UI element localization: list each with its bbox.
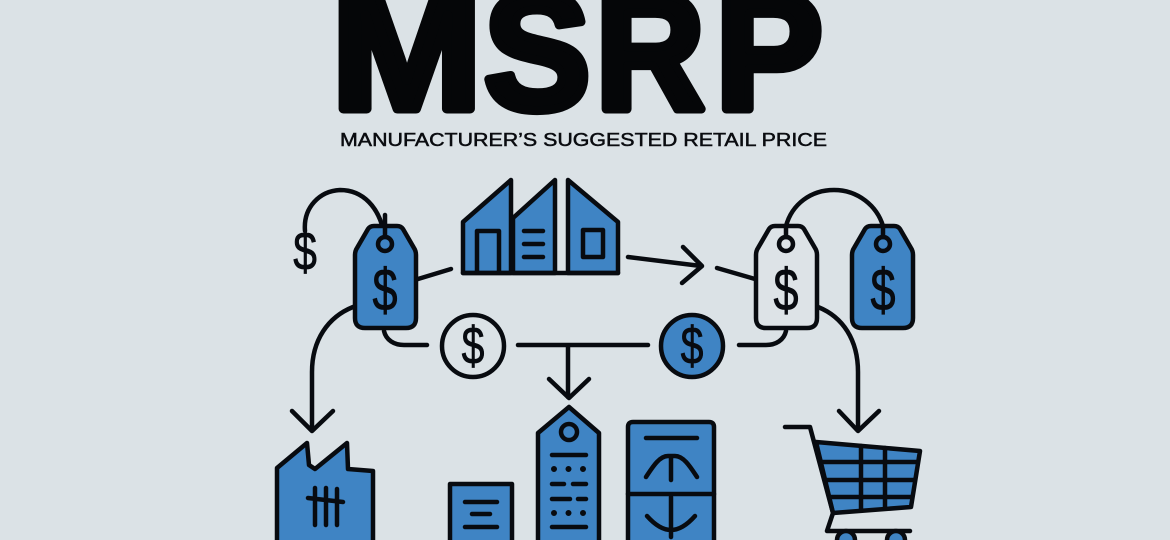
- icon: blue dollar coin: $: [681, 316, 703, 375]
- icon: loose dollar sign with wire to left tag: [293, 190, 385, 282]
- connector: white tag to blue coin: [739, 331, 786, 345]
- icon: left blue price tag: $: [372, 258, 398, 323]
- icon: manufacturer factory: [463, 180, 618, 273]
- icon: outline dollar coin: [442, 315, 504, 377]
- arrow: factory to retail tag: [628, 247, 702, 283]
- icon: left blue price tag: [355, 215, 416, 328]
- subtitle: MANUFACTURER’S SUGGESTED RETAIL PRICE: [340, 129, 827, 150]
- icon: tall product tag: [538, 407, 599, 540]
- icon: loose dollar sign with wire to left tag: $: [293, 222, 317, 282]
- icon: document: [450, 484, 512, 540]
- icon: shopping cart: [785, 427, 920, 540]
- connector: left tag to factory: [418, 269, 451, 279]
- connector: arrow to white tag: [717, 268, 755, 279]
- icon: up and down price panel: [628, 422, 714, 540]
- title: [331, 0, 823, 145]
- icon: bottom factory: [277, 443, 373, 540]
- icon: blue dollar coin: [661, 315, 723, 377]
- icon: white price tag: [756, 226, 817, 328]
- icon: blue price tag on right: $: [870, 258, 896, 323]
- icon: white price tag: $: [773, 258, 799, 323]
- connector: coin to coin with down arrow: [518, 345, 648, 398]
- arrow: left tag down to factory: [292, 307, 353, 431]
- connector: wire joining the two right tags: [786, 190, 883, 237]
- connector: left tag to outline coin: [384, 331, 427, 345]
- arrow: white tag down to cart: [818, 307, 879, 431]
- icon: outline dollar coin: $: [462, 316, 484, 375]
- icon: blue price tag on right: [852, 226, 913, 328]
